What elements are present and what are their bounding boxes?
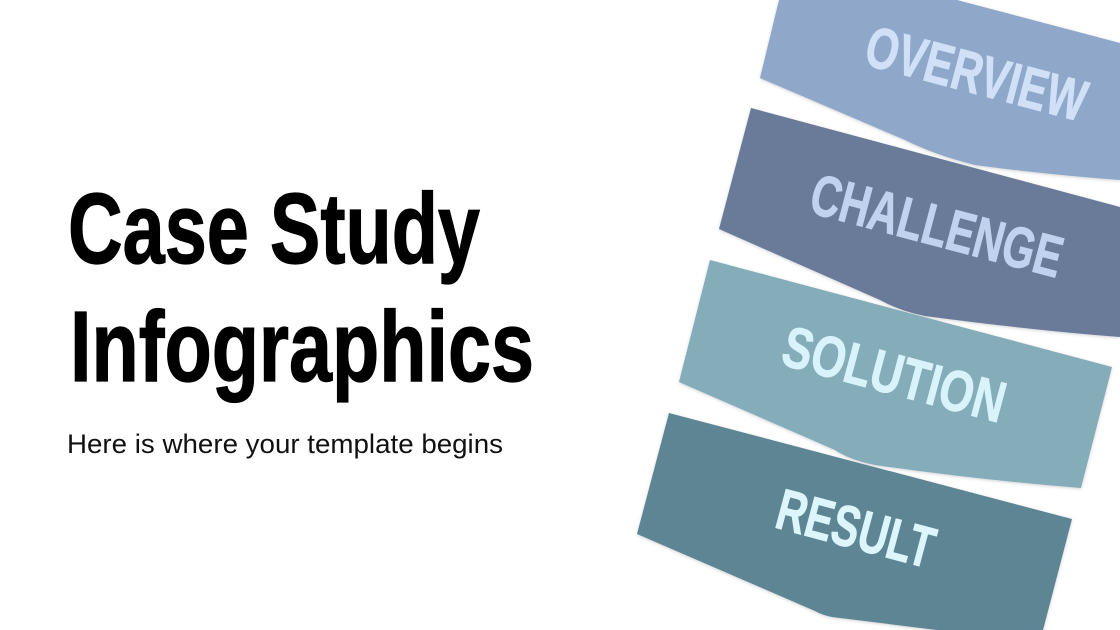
panel: overview bbox=[760, 0, 1120, 180]
panel: result bbox=[637, 413, 1072, 630]
subtitle: Here is where your template begins bbox=[67, 429, 503, 459]
title: Case Study bbox=[68, 173, 480, 285]
title bbox=[68, 173, 534, 403]
panel: solution bbox=[679, 260, 1112, 488]
panel: solution: SOLUTION bbox=[776, 314, 1013, 436]
panel: result: RESULT bbox=[770, 477, 942, 581]
panel: challenge bbox=[719, 108, 1120, 337]
title: Infographics bbox=[70, 291, 534, 403]
